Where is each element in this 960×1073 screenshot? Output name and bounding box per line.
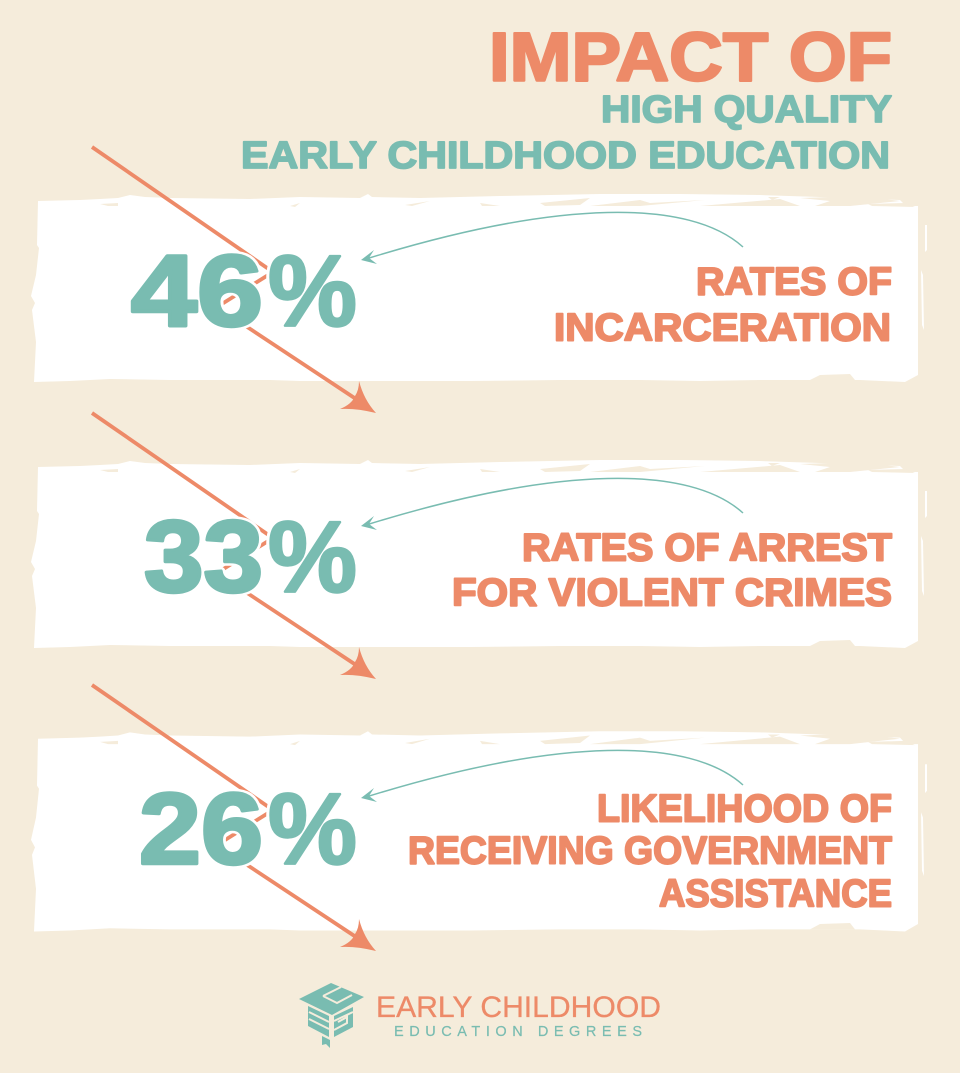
label: rates of incarceration: RATES OF bbox=[696, 260, 892, 304]
title bbox=[241, 18, 892, 177]
logo bbox=[299, 983, 661, 1048]
statistic: 33% bbox=[144, 502, 357, 614]
zigzag down arrow bbox=[92, 413, 376, 679]
statistic: 33%: 33 bbox=[144, 502, 263, 614]
statistic: 46% bbox=[131, 236, 357, 348]
statistic: 46%: % bbox=[268, 236, 357, 348]
label: rates of arrest for violent crimes: FOR VIOLENT CRIMES bbox=[452, 572, 892, 614]
logo wordmark: EARLY CHILDHOOD bbox=[376, 991, 661, 1024]
icon: graduation cap bbox=[299, 983, 364, 1048]
brush background bbox=[31, 460, 927, 648]
label: rates of incarceration bbox=[554, 260, 892, 350]
curved pointer arrow bbox=[361, 478, 743, 530]
subheading: high quality: HIGH QUALITY bbox=[601, 89, 892, 131]
label: likelihood of receiving government assistance bbox=[408, 788, 892, 916]
statistic: 26%: % bbox=[268, 774, 357, 886]
label: likelihood of receiving government assistance: LIKELIHOOD OF bbox=[597, 788, 892, 830]
statistic: 26% bbox=[139, 774, 357, 886]
label: likelihood of receiving government assistance: RECEIVING GOVERNMENT bbox=[408, 830, 892, 872]
label: likelihood of receiving government assistance: ASSISTANCE bbox=[659, 872, 892, 916]
statistic: 46%: 46 bbox=[131, 236, 263, 348]
zigzag down arrow bbox=[92, 685, 376, 951]
statistic: 26%: 26 bbox=[139, 774, 263, 886]
panel: government assistance bbox=[31, 685, 927, 951]
label: rates of arrest for violent crimes bbox=[452, 526, 892, 614]
statistic: 33%: 33 bbox=[144, 502, 263, 614]
zigzag down arrow bbox=[92, 147, 376, 413]
logo tagline: EDUCATION DEGREES bbox=[394, 1024, 642, 1040]
panel: arrest for violent crimes bbox=[31, 413, 927, 679]
curved pointer arrow bbox=[361, 750, 743, 802]
label: rates of arrest for violent crimes: RATES OF ARREST bbox=[522, 526, 892, 570]
brush background bbox=[31, 194, 927, 382]
statistic: 46%: 46 bbox=[131, 236, 263, 348]
brush background bbox=[31, 731, 927, 932]
label: rates of incarceration: INCARCERATION bbox=[554, 306, 891, 350]
curved pointer arrow bbox=[361, 212, 743, 264]
subheading: early childhood education: EARLY CHILDHOOD EDUCATION bbox=[241, 135, 890, 177]
heading: impact of: IMPACT OF bbox=[489, 18, 892, 96]
statistic: 33%: % bbox=[268, 502, 357, 614]
statistic: 26%: 26 bbox=[139, 774, 263, 886]
statistic: 26%: % bbox=[268, 774, 357, 886]
panel: incarceration bbox=[31, 147, 927, 413]
statistic: 46%: % bbox=[268, 236, 357, 348]
statistic: 33%: % bbox=[268, 502, 357, 614]
